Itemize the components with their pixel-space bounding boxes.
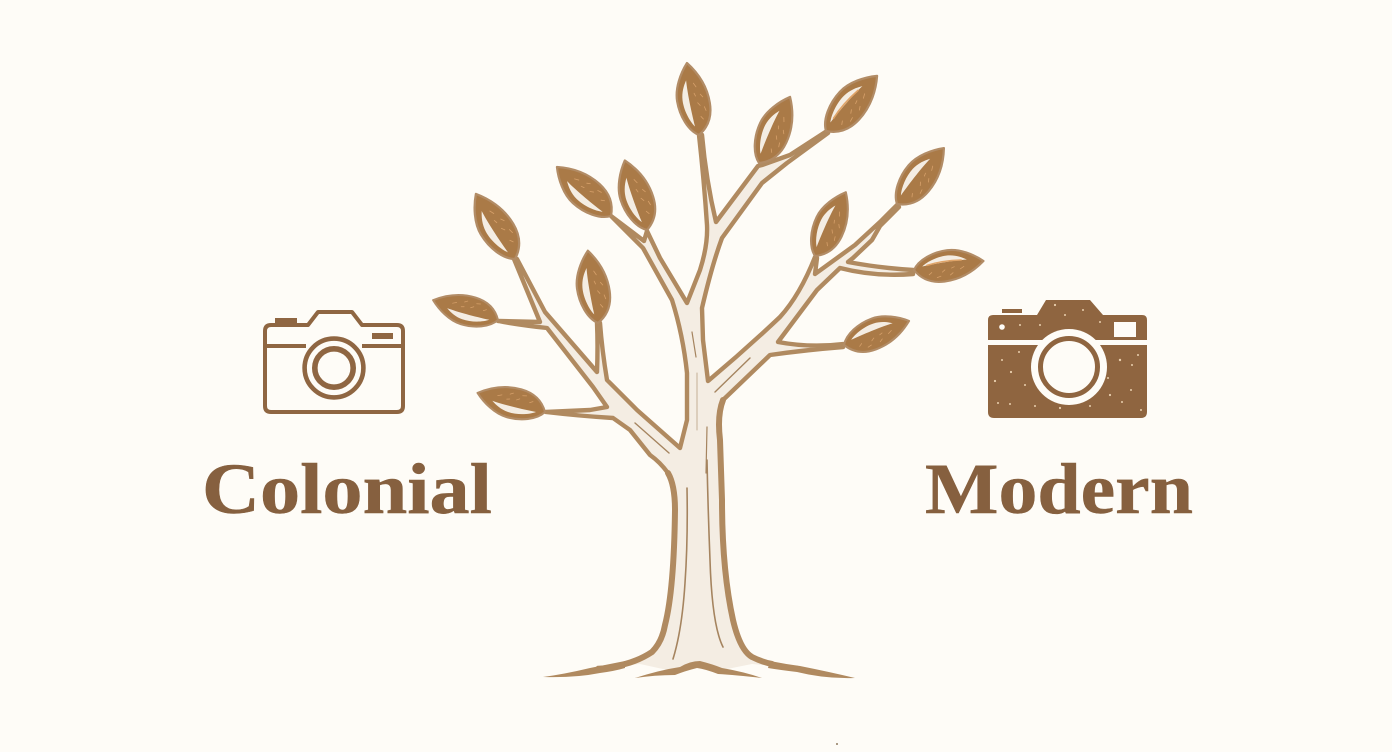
- leaf: upper left pair, left: [546, 155, 622, 228]
- leaf: upper left pair, right: [610, 156, 662, 235]
- icon: outline camera (colonial): [265, 312, 403, 412]
- leaf: top right outer: [814, 65, 889, 142]
- tree illustration: [429, 60, 985, 678]
- leaf: right upper: [885, 138, 956, 214]
- leaf: far left upper: [462, 185, 529, 268]
- leaf: top right inner: [745, 90, 805, 170]
- leaf: far right: [912, 246, 985, 285]
- icon: solid camera (modern): [988, 300, 1147, 418]
- leaves: [429, 60, 985, 427]
- leaf: lower left: [473, 378, 549, 427]
- bark lines: [635, 332, 750, 659]
- leaf: right lower: [839, 307, 914, 359]
- leaf: left middle: [572, 248, 614, 325]
- label: Colonial: Colonial: [202, 449, 492, 529]
- label: Modern: Modern: [925, 449, 1193, 529]
- leaf: right inner: [801, 185, 860, 263]
- leaf: top: [671, 60, 715, 138]
- tree roots: [543, 661, 855, 678]
- tree trunk and branches: [498, 131, 913, 671]
- leaf: far left: [429, 286, 502, 334]
